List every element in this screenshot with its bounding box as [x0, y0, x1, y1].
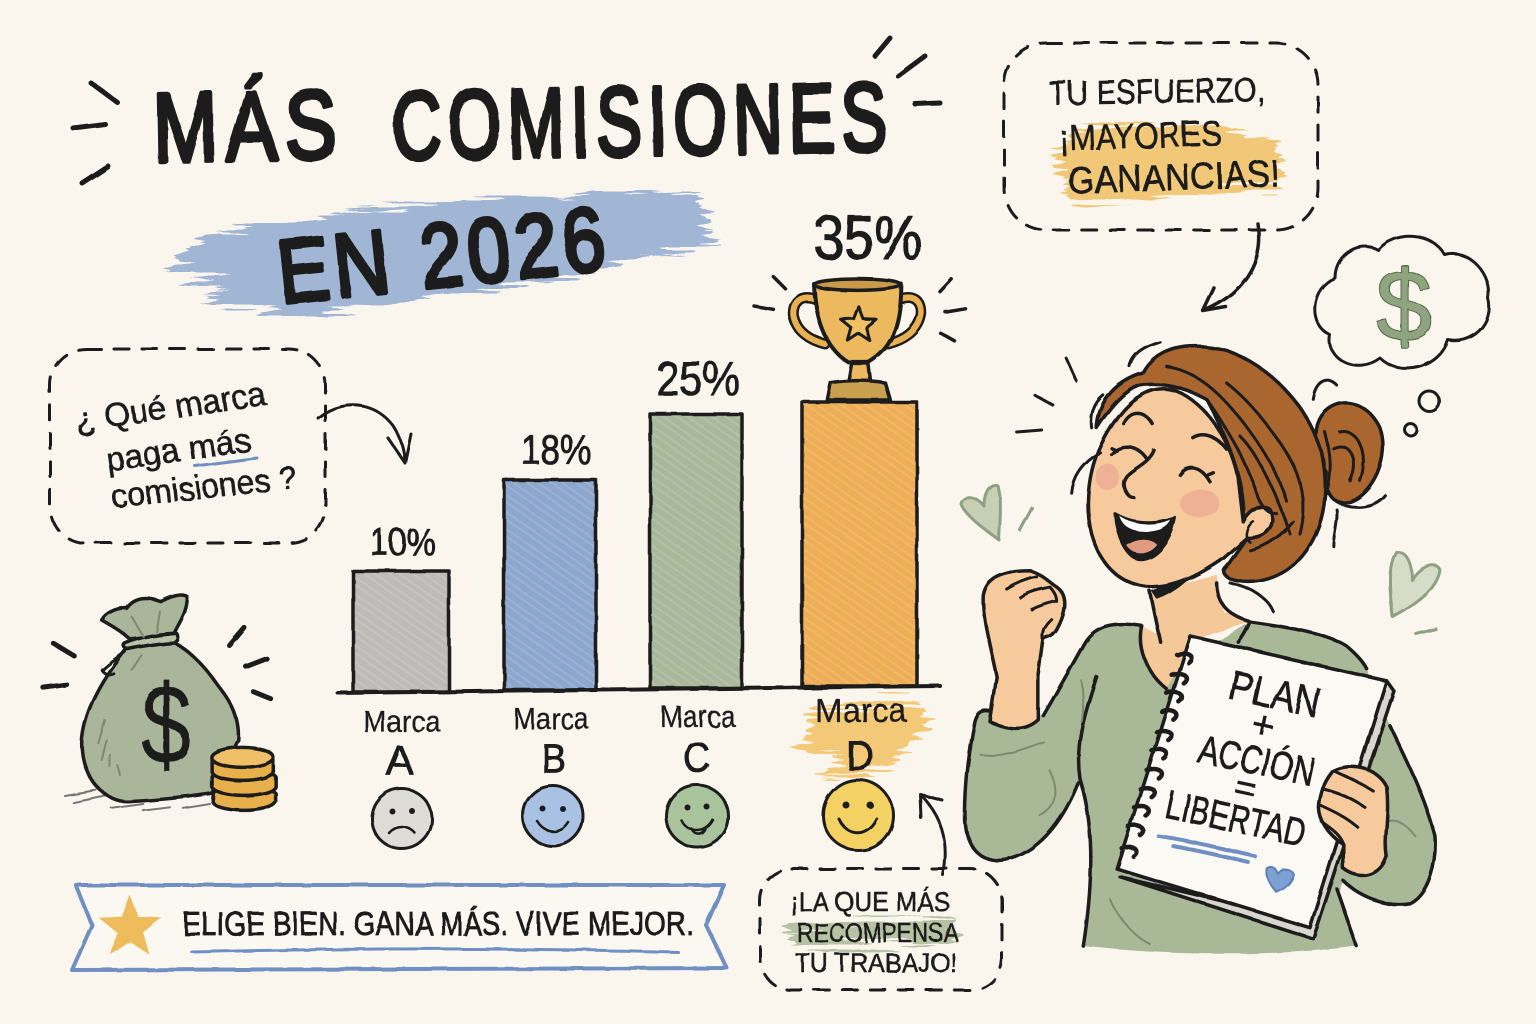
brand labels: A: [386, 737, 414, 784]
hair: [1097, 346, 1325, 582]
callout: la que más recompensa: RECOMPENSA: [797, 918, 959, 948]
value 18%: 18%: [521, 426, 591, 473]
callout: question: comisiones ?: [109, 458, 298, 515]
subtitle with blue brush stroke: [165, 187, 715, 323]
holding hand: [1319, 767, 1388, 875]
bar chart: [338, 204, 940, 850]
value 10%: 10%: [370, 522, 436, 564]
arrow: to brand D: [920, 794, 945, 875]
callout: question: ¿ Qué marca: [73, 375, 269, 438]
heart ticks: [1020, 508, 1436, 634]
callout: tu esfuerzo: GANANCIAS!: [1067, 153, 1280, 203]
brand labels: Marca: [363, 704, 442, 739]
callout: tu esfuerzo: [1004, 43, 1318, 230]
handles: [793, 298, 921, 344]
banner star: [99, 895, 161, 955]
callout: tu esfuerzo: TU ESFUERZO,: [1048, 71, 1265, 113]
callout: la que más recompensa: TU TRABAJO!: [795, 948, 957, 978]
title word: más: MÁS: [152, 70, 345, 183]
heart right: [1390, 552, 1440, 617]
bag dollar sign: $: [141, 662, 191, 787]
sparks: [754, 277, 965, 341]
icon: money bag: [43, 595, 276, 811]
callout: question: paga más: [104, 421, 253, 478]
value 25%: 25%: [656, 353, 740, 406]
ear detail: [1246, 522, 1253, 542]
notebook: [1120, 681, 1394, 939]
face: smile green: [666, 785, 728, 847]
subtitle with blue brush stroke: EN 2026: [273, 187, 615, 323]
cup star: [841, 306, 876, 340]
brand labels: C: [684, 734, 710, 781]
value 35%: 35%: [814, 204, 922, 273]
heart left: [961, 485, 1000, 540]
spiral binding: [1122, 653, 1191, 856]
brand labels: Marca: [513, 701, 590, 736]
brand labels: Marca: [815, 692, 908, 729]
arrow: to woman: [1203, 224, 1259, 311]
pencil texture on bars: [355, 404, 915, 690]
title word: comisiones: COMISIONES: [391, 61, 894, 180]
axis: [338, 686, 940, 693]
icon: trophy: [754, 277, 965, 400]
bar C: [650, 414, 742, 688]
brand labels: Marca: [660, 699, 737, 734]
title sparks right: [875, 38, 940, 104]
bar B: [504, 480, 596, 690]
notebook text: LIBERTAD: [1162, 783, 1310, 856]
bar A: [353, 571, 449, 692]
title: [73, 61, 894, 183]
bar D: [802, 402, 917, 686]
arrow: question to chart: [318, 405, 411, 463]
face: smile blue: [523, 786, 583, 846]
raised fist: [983, 571, 1065, 728]
notebook text: +: [1248, 703, 1279, 749]
notebook heart: [1266, 867, 1294, 892]
banner text: ELIGE BIEN. GANA MÁS. VIVE MEJOR.: [182, 905, 694, 942]
banner: [72, 885, 727, 970]
hair bun: [1316, 403, 1383, 502]
cheeks: [1096, 464, 1119, 490]
sweater: [965, 622, 1435, 954]
cup: [814, 284, 901, 362]
callout: la que más recompensa: [760, 869, 1002, 990]
callout: question: [50, 349, 325, 543]
coins: [211, 747, 276, 810]
notebook text: ACCIÓN: [1194, 727, 1319, 795]
notebook text: PLAN: [1225, 661, 1325, 726]
neck: [1140, 575, 1250, 689]
face: sad: [372, 789, 432, 849]
cloud dollar: $: [1376, 250, 1432, 362]
stem and base: [848, 363, 871, 382]
thought bubble: [1315, 236, 1489, 435]
callout: tu esfuerzo: ¡MAYORES: [1059, 112, 1222, 159]
motion sparks: [1017, 359, 1077, 432]
highlight behind Marca D: [800, 702, 928, 778]
face: [1088, 389, 1272, 587]
callout: la que más recompensa: ¡LA QUE MÁS: [790, 886, 950, 917]
notebook text: =: [1231, 766, 1260, 810]
title sparks left: [73, 83, 118, 183]
woman with notebook: [965, 342, 1435, 954]
mouth: [1115, 514, 1175, 559]
brand labels: D: [846, 732, 874, 779]
nose: [1124, 450, 1154, 497]
face: happy yellow: [823, 780, 893, 850]
notebook text: [1162, 661, 1325, 856]
notebook underline: [1158, 836, 1255, 862]
brand labels: [363, 692, 908, 784]
brand labels: B: [542, 735, 566, 782]
eyes and brows: [1112, 413, 1227, 482]
